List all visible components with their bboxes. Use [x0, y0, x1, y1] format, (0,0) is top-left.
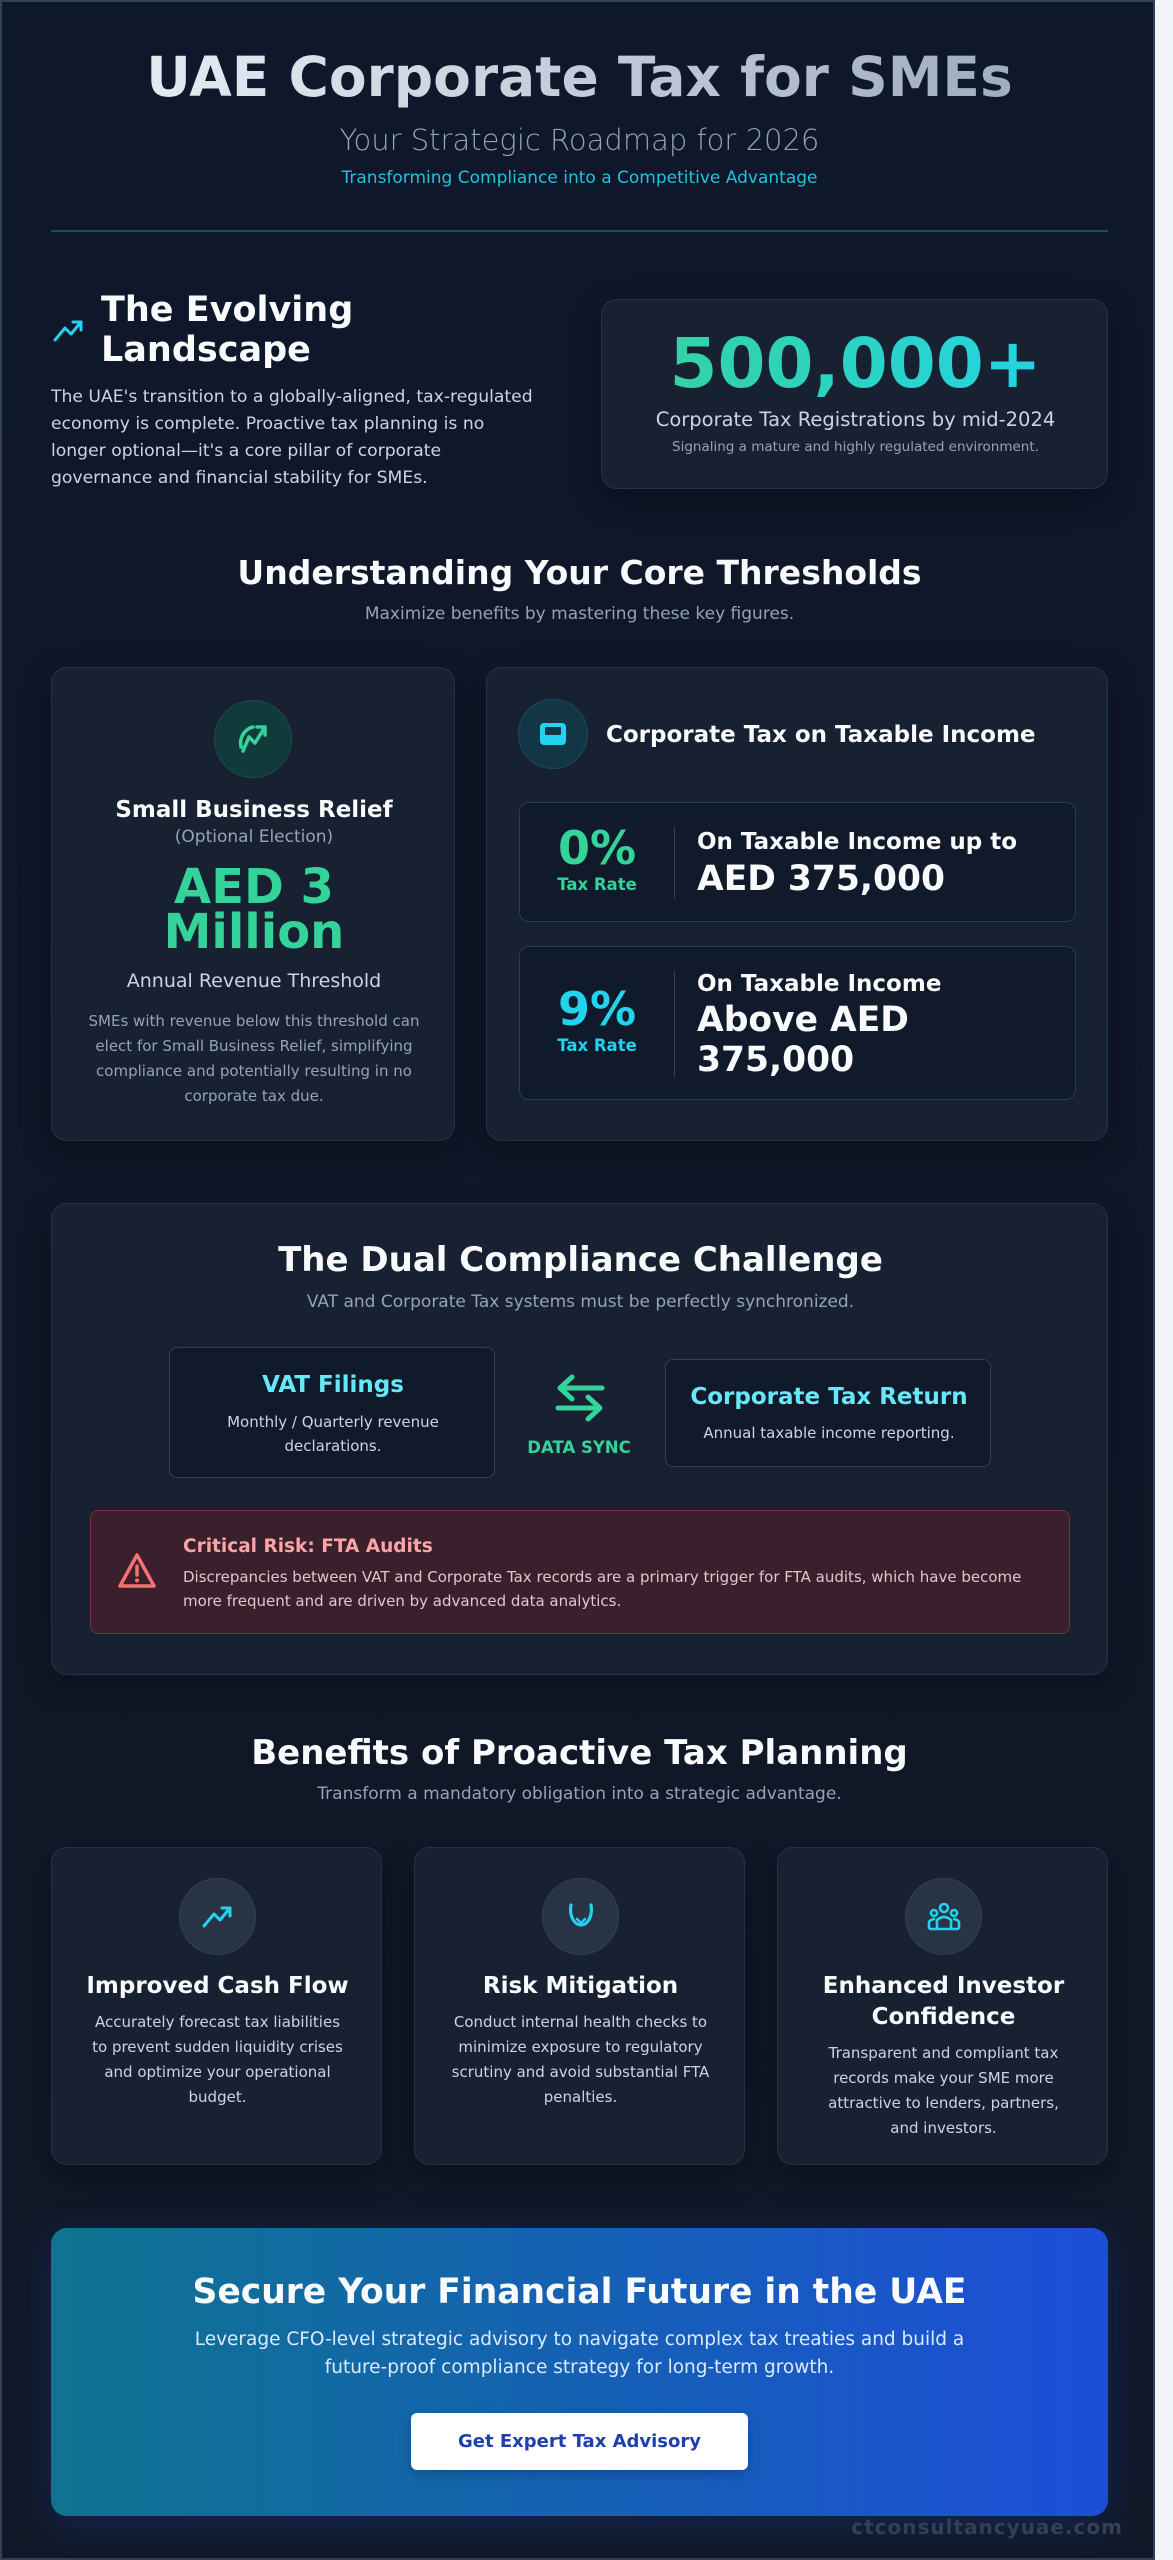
callout: critical risk: Discrepancies between VAT and Corporate Tax records are a primary trigger for FTA audits, which have become more frequent and are driven by advanced data analytics.: [183, 1568, 1021, 1610]
section: evolving landscape: [50, 290, 533, 488]
rate box: 9%: 9%: [558, 982, 636, 1036]
box: corporate tax return: Annual taxable income reporting.: [703, 1424, 955, 1442]
icon: card: [518, 699, 588, 769]
box: VAT filings: VAT Filings: [262, 1372, 404, 1398]
rate box: 0%: On Taxable Income up to: [697, 829, 1017, 855]
icon: shield: [542, 1878, 619, 1955]
threshold label: Annual Revenue Threshold: [127, 970, 381, 992]
card: investor confidence: Enhanced Investor: [823, 1973, 1064, 1999]
rate box: 9%: [519, 946, 1076, 1100]
box: corporate tax return: [665, 1359, 991, 1467]
box: corporate tax return: Corporate Tax Return: [690, 1384, 968, 1410]
heading: The Dual Compliance Challenge: [278, 1240, 883, 1280]
rate box: 9%: Tax Rate: [557, 1036, 637, 1055]
heading: The Evolving: [101, 290, 353, 330]
heading: [101, 290, 353, 370]
panel: small business relief: [51, 667, 455, 1141]
CTA heading: Secure Your Financial Future in the UAE: [193, 2272, 966, 2312]
card: risk mitigation: [414, 1847, 745, 2165]
rate box: 0%: Tax Rate: [557, 875, 637, 894]
icon: data sync arrows: [527, 1374, 631, 1457]
heading: Landscape: [101, 330, 311, 370]
box: VAT filings: Monthly / Quarterly revenue declarations.: [227, 1413, 439, 1455]
stat label: Corporate Tax Registrations by mid-2024: [656, 408, 1055, 431]
stat card: [601, 299, 1108, 489]
threshold value: AED 3: [174, 859, 334, 915]
title: UAE Corporate Tax for SMEs: [146, 45, 1013, 109]
card: improved cash flow: Accurately forecast tax liabilities to prevent sudden liquidity crises and optimize your operational budget.: [92, 2013, 343, 2106]
callout: critical risk: [90, 1510, 1070, 1634]
icon: people: [905, 1878, 982, 1955]
big number: [602, 321, 1109, 407]
rate box: 0%: 0%: [558, 821, 636, 875]
tagline: Transforming Compliance into a Competitive Advantage: [342, 168, 818, 188]
rate box: 0%: AED 375,000: [697, 859, 945, 899]
rate box: 0%: [519, 802, 1076, 922]
heading: Small Business Relief: [115, 797, 393, 823]
icon: trend arrow: [53, 320, 83, 342]
CTA button: [411, 2413, 748, 2470]
section heading: thresholds: Understanding Your Core Thresholds: [237, 553, 922, 592]
section heading: benefits: Benefits of Proactive Tax Planning: [251, 1733, 908, 1773]
card: investor confidence: Confidence: [872, 2004, 1015, 2030]
callout: critical risk: Critical Risk: FTA Audits: [183, 1536, 433, 1557]
CTA text: Leverage CFO-level strategic advisory to navigate complex tax treaties and build a future-proof compliance strategy for long-term growth.: [195, 2329, 964, 2378]
threshold value: Million: [164, 904, 344, 960]
rate box: 9%: 375,000: [697, 1040, 854, 1080]
icon: data sync arrows: DATA SYNC: [527, 1438, 631, 1457]
stat note: Signaling a mature and highly regulated environment.: [672, 439, 1039, 455]
box: VAT filings: [169, 1347, 495, 1478]
watermark: ctconsultancyuae.com: [851, 2515, 1123, 2539]
icon: warning: [118, 1553, 156, 1588]
optional note: (Optional Election): [175, 827, 333, 847]
icon: relief: [214, 700, 292, 778]
threshold value: [164, 859, 344, 960]
rate box: 9%: Above AED: [697, 1000, 909, 1040]
panel: dual compliance: [51, 1203, 1108, 1675]
card: improved cash flow: [51, 1847, 382, 2165]
heading: Corporate Tax on Taxable Income: [606, 722, 1036, 748]
rate box: 9%: On Taxable Income: [697, 971, 941, 997]
card: risk mitigation: Conduct internal health checks to minimize exposure to regulatory scrutiny and avoid substantial FTA penalties.: [452, 2013, 709, 2106]
section subtitle: Maximize benefits by mastering these key figures.: [365, 604, 794, 624]
title: [2, 42, 1157, 112]
description: SMEs with revenue below this threshold can elect for Small Business Relief, simplifying compliance and potentially resulting in no corporate tax due.: [89, 1012, 419, 1105]
big number: 500,000+: [669, 324, 1042, 404]
card: improved cash flow: Improved Cash Flow: [86, 1973, 349, 1999]
CTA button: Get Expert Tax Advisory: [458, 2431, 701, 2452]
card: risk mitigation: Risk Mitigation: [483, 1973, 678, 1999]
paragraph: The UAE's transition to a globally-aligned, tax-regulated economy is complete. Proactive tax planning is no longer optional—it's a core pillar of corporate governance and financial stability for SMEs.: [51, 387, 533, 488]
panel: corporate tax rates: [486, 667, 1108, 1141]
card: investor confidence: [777, 1847, 1108, 2165]
CTA banner: [51, 2228, 1108, 2516]
icon: trend: [179, 1878, 256, 1955]
card: investor confidence: Transparent and compliant tax records make your SME more attractive to lenders, partners, and investors.: [828, 2044, 1059, 2137]
subtitle: VAT and Corporate Tax systems must be perfectly synchronized.: [307, 1292, 854, 1312]
subtitle: Your Strategic Roadmap for 2026: [340, 123, 819, 157]
section subtitle: Transform a mandatory obligation into a strategic advantage.: [317, 1784, 842, 1804]
